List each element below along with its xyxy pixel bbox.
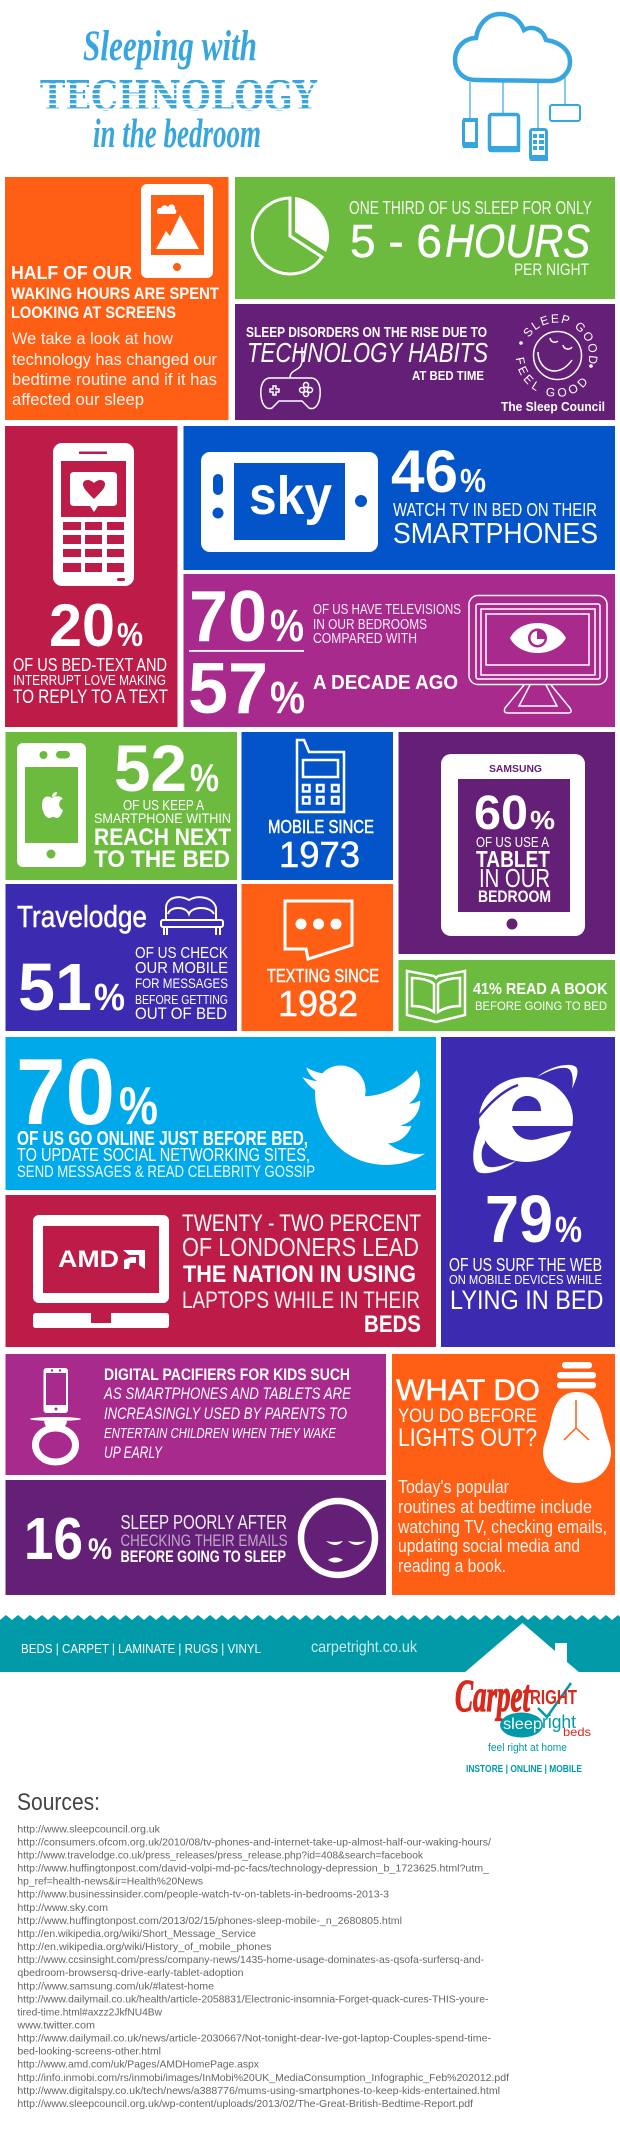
icon: pie chart <box>252 197 329 274</box>
logo: carpetright sleepright beds: sleep <box>503 1716 542 1733</box>
panel: half of our waking hours <box>5 177 228 420</box>
icon: twitter bird <box>303 1065 425 1165</box>
stat: % <box>94 977 125 1019</box>
text block <box>313 601 461 647</box>
stat: % <box>190 757 219 800</box>
heading <box>11 263 220 322</box>
text block: OF US USE A <box>476 834 549 851</box>
text block: bedtime routine and if it has <box>12 370 217 389</box>
icon: amd laptop: AMD <box>58 1246 119 1273</box>
icon: cloud with hanging devices <box>455 14 580 161</box>
text block: IN OUR <box>479 863 550 893</box>
stat <box>350 215 590 267</box>
text block: UP EARLY <box>104 1443 163 1462</box>
logo: carpetright sleepright beds <box>455 1670 591 1775</box>
panel: sleep disorders <box>235 304 615 420</box>
panel: 46% sky <box>184 426 615 570</box>
stat: % <box>117 616 143 653</box>
stat: 57 percent: % <box>270 672 305 723</box>
stat: 16 <box>24 1506 83 1572</box>
sources list <box>16 1824 509 2110</box>
text block: technology has changed our <box>12 350 217 369</box>
panel: 41% read a book <box>398 960 615 1031</box>
panel: texting since 1982: 1982 <box>278 983 358 1024</box>
text block: updating social media and <box>398 1536 580 1556</box>
sources list: http://www.huffingtonpost.com/david-volpi-md-pc-facs/technology-depression_b_1723625.html?utm_ <box>17 1864 489 1874</box>
icon: samsung tablet: SAMSUNG <box>489 764 542 775</box>
text block <box>135 945 228 1023</box>
sources heading: Sources: <box>17 1789 100 1816</box>
sources list: http://www.dailymail.co.uk/health/article-2058831/Electronic-insomnia-Forget-quack-cures-THIS-youre- <box>17 1994 489 2005</box>
text block: affected our sleep <box>12 390 144 409</box>
icon: amd laptop <box>33 1215 169 1328</box>
text block: BEFORE GOING TO SLEEP <box>120 1547 286 1566</box>
text block <box>120 1512 288 1566</box>
text block: OF US KEEP A <box>123 797 204 814</box>
text block: TO UPDATE SOCIAL NETWORKING SITES, <box>17 1145 310 1165</box>
icon: tablet with picture <box>141 184 213 278</box>
footer band: carpetright <box>0 1615 620 1673</box>
sources list: tired-time.html#axzz2JkfNU4Bw <box>17 2007 162 2018</box>
text block: ENTERTAIN CHILDREN WHEN THEY WAKE <box>104 1425 337 1442</box>
heading: LIGHTS OUT? <box>398 1424 537 1452</box>
panel: 16% sleep poorly <box>6 1480 386 1595</box>
text block: OF US HAVE TELEVISIONS <box>313 601 461 618</box>
panel: mobile since 1973: MOBILE SINCE <box>268 817 374 837</box>
panel: 52% smartphone <box>6 731 237 880</box>
icon: speech bubble <box>285 901 352 959</box>
stat: 79 <box>485 1182 553 1257</box>
panel: sleep disorders: AT BED TIME <box>412 368 484 383</box>
sources list: http://www.sleepcouncil.org.uk <box>17 1824 161 1835</box>
panel: 70% go online twitter <box>6 1037 436 1190</box>
sources list: http://www.travelodge.co.uk/press_releases/press_release.php?id=408&search=facebook <box>17 1850 424 1862</box>
text block: OF LONDONERS LEAD <box>182 1232 419 1262</box>
stat <box>18 950 125 1025</box>
panel: 70% vs 57% televisions: A DECADE AGO <box>313 672 458 694</box>
panel: 41% read a book: 41% READ A BOOK <box>473 981 608 998</box>
sources list: qbedroom-browsersq-drive-early-tablet-adoption <box>17 1968 244 1979</box>
icon: sleep good feel good badge <box>516 314 598 397</box>
icon: phone with sky logo <box>201 452 378 552</box>
panel: sleep disorders: TECHNOLOGY HABITS <box>247 337 488 368</box>
sources list: http://en.wikipedia.org/wiki/History_of_mobile_phones <box>17 1942 272 1953</box>
icon: vintage mobile phone <box>297 740 344 812</box>
text block <box>397 1477 607 1576</box>
panel: 20% bed-text <box>5 426 178 727</box>
heading: YOU DO BEFORE <box>398 1406 537 1427</box>
sources list: www.twitter.com <box>16 2020 95 2032</box>
sources list: http://www.amd.com/uk/Pages/AMDHomePage.aspx <box>17 2060 260 2071</box>
text block: REACH NEXT <box>94 824 231 851</box>
text block: TO THE BED <box>94 846 230 873</box>
panel: 46% sky: SMARTPHONES <box>393 518 598 550</box>
title: Sleeping with <box>83 23 257 70</box>
stat: 57 percent <box>188 649 305 729</box>
stat: 70 percent: % <box>270 600 304 651</box>
text block: TO REPLY TO A TEXT <box>13 687 168 708</box>
stat: 5 - 6 <box>350 215 442 267</box>
text block: INTERRUPT LOVE MAKING <box>13 672 166 689</box>
panel: twenty-two percent amd <box>6 1195 436 1347</box>
sources list: http://info.inmobi.com/rs/inmobi/images/InMobi%20UK_MediaConsumption_Infographic_Feb%202012.pdf <box>17 2073 509 2084</box>
stat: 60 <box>474 787 528 840</box>
sources list: http://consumers.ofcom.org.uk/2010/08/tv-phones-and-internet-take-up-almost-half-our-waking-hours/ <box>17 1837 491 1848</box>
logo: carpetright sleepright beds: beds <box>563 1725 591 1739</box>
panel: sleep disorders: SLEEP DISORDERS ON THE RISE DUE TO <box>246 325 487 341</box>
heading: WHAT DO <box>396 1374 540 1407</box>
panel: mobile since 1973 <box>242 732 393 880</box>
sources list: hp_ref=health-news&ir=Health%20News <box>17 1877 203 1888</box>
text block: DIGITAL PACIFIERS FOR KIDS SUCH <box>104 1365 350 1384</box>
stat: HOURS <box>445 215 590 267</box>
stat: 70 percent <box>189 577 304 657</box>
icon: sleep good feel good badge: SLEEP GOOD <box>524 314 598 364</box>
sources list: http://www.huffingtonpost.com/2013/02/15/phones-sleep-mobile-_n_2680805.html <box>17 1916 402 1927</box>
sources list: bed-looking-screens-other.html <box>17 2047 161 2058</box>
text block: CHECKING THEIR EMAILS <box>120 1531 288 1550</box>
icon: internet explorer logo <box>473 1065 577 1173</box>
sources list: http://www.ccsinsight.com/press/company-news/1435-home-usage-dominates-as-qsofa-surfersq-and- <box>17 1955 484 1966</box>
text block: BEDROOM <box>478 887 551 906</box>
panel: sleep disorders: The Sleep Council <box>501 399 605 414</box>
text block: BEDS <box>364 1311 421 1338</box>
sources list: http://www.dailymail.co.uk/news/article-2030667/Not-tonight-dear-Ive-got-laptop-Couples-spend-time- <box>17 2034 491 2045</box>
logo: carpetright sleepright beds: feel right at home <box>488 1742 567 1754</box>
panel: digital pacifiers <box>6 1354 386 1475</box>
icon: television with eye <box>469 596 607 713</box>
icon: game controller <box>261 347 320 408</box>
panel: texting since 1982 <box>242 884 393 1031</box>
text block <box>476 834 551 906</box>
text block: TABLET <box>476 846 550 872</box>
text block: BEFORE GETTING <box>135 992 228 1007</box>
text block: FOR MESSAGES <box>135 975 228 991</box>
text block: reading a book. <box>398 1556 506 1576</box>
stat: % <box>555 1209 582 1250</box>
stat: 20 <box>49 592 115 659</box>
stat: 57 percent: 57 <box>188 649 268 729</box>
title: TECHNOLOGY <box>40 72 318 120</box>
stat: % <box>119 1077 158 1136</box>
text block: AS SMARTPHONES AND TABLETS ARE <box>103 1384 352 1403</box>
panel: 41% read a book: BEFORE GOING TO BED <box>475 999 607 1013</box>
stat: % <box>460 462 486 499</box>
logo: carpetright sleepright beds: INSTORE | ONLINE | MOBILE <box>466 1764 582 1775</box>
sources list: http://www.businessinsider.com/people-watch-tv-on-tablets-in-bedrooms-2013-3 <box>17 1890 389 1901</box>
icon: phone with sky logo: sky <box>249 466 332 526</box>
panel: 51% travelodge <box>6 884 237 1031</box>
text block: INCREASINGLY USED BY PARENTS TO <box>104 1404 347 1423</box>
icon: bed <box>161 897 223 935</box>
text block: routines at bedtime include <box>398 1497 592 1517</box>
icon: samsung tablet <box>441 754 585 936</box>
text block: OF US GO ONLINE JUST BEFORE BED, <box>17 1128 308 1150</box>
text block: SMARTPHONE WITHIN <box>94 810 231 826</box>
sources list: http://www.samsung.com/uk/#latest-home <box>17 1981 214 1992</box>
panel: 70% vs 57% televisions <box>184 574 615 729</box>
title: in the bedroom <box>93 110 261 156</box>
text block <box>182 1210 421 1338</box>
text block <box>12 329 217 409</box>
stat: 51 <box>18 950 92 1025</box>
panel: 60% tablet samsung <box>398 732 615 954</box>
icon: sleep good feel good badge: FEEL GOOD <box>516 357 586 397</box>
text block: TWENTY - TWO PERCENT <box>182 1210 421 1237</box>
stat: 52 <box>114 731 187 805</box>
logo: carpetright sleepright beds: Carpet <box>455 1670 531 1721</box>
sources list: http://www.digitalspy.co.uk/tech/news/a388776/mums-using-smartphones-to-keep-kids-entertained.html <box>17 2086 500 2097</box>
icon: house silhouette <box>464 1623 580 1673</box>
stat: 70 percent: 70 <box>189 577 267 657</box>
stat <box>114 731 219 805</box>
logo: carpetright sleepright beds: RIGHT <box>530 1687 577 1709</box>
text block: SLEEP POORLY AFTER <box>120 1512 287 1534</box>
text block: SEND MESSAGES & READ CELEBRITY GOSSIP <box>17 1162 315 1181</box>
icon: phone pacifier <box>30 1368 81 1462</box>
text block: LAPTOPS WHILE IN THEIR <box>182 1287 420 1314</box>
heading <box>396 1374 540 1452</box>
heading: LOOKING AT SCREENS <box>11 303 176 322</box>
sources list: http://en.wikipedia.org/wiki/Short_Message_Service <box>17 1929 256 1940</box>
panel: 51% travelodge: Travelodge <box>17 899 147 934</box>
panel: what do you do before lights out <box>392 1354 615 1595</box>
text block <box>13 655 168 708</box>
heading: HALF OF OUR <box>11 263 132 283</box>
text block <box>17 1128 315 1181</box>
text block <box>94 797 231 873</box>
title <box>40 23 318 156</box>
text block: OUT OF BED <box>135 1004 227 1023</box>
text block: THE NATION IN USING <box>183 1261 416 1288</box>
panel: 5-6 hours: PER NIGHT <box>514 260 589 279</box>
footer band: carpetright: BEDS | CARPET | LAMINATE | RUGS | VINYL <box>21 1641 261 1656</box>
text block: Today's popular <box>398 1477 509 1497</box>
stat: % <box>530 805 555 835</box>
text block: OF US CHECK <box>135 945 228 962</box>
stat: 46 <box>391 438 458 505</box>
sources list: http://www.sleepcouncil.org.uk/wp-content/uploads/2013/02/The-Great-British-Bedtime-Report.pdf <box>17 2099 473 2110</box>
footer band: carpetright: carpetright.co.uk <box>311 1639 418 1656</box>
icon: smartphone with apple <box>17 743 86 867</box>
icon: sleepy face <box>301 1501 375 1575</box>
stat: 70 <box>16 1039 115 1144</box>
text block: OF US BED-TEXT AND <box>13 655 167 675</box>
panel: mobile since 1973: 1973 <box>279 834 360 875</box>
text block: IN OUR BEDROOMS <box>313 616 427 633</box>
icon: open book <box>407 971 465 1022</box>
sources list: http://www.sky.com <box>17 1903 108 1914</box>
stat: % <box>88 1533 112 1566</box>
logo: carpetright sleepright beds: right <box>542 1712 576 1732</box>
icon: light bulb <box>543 1362 611 1483</box>
heading: WAKING HOURS ARE SPENT <box>11 284 220 303</box>
stat <box>474 787 555 840</box>
panel: texting since 1982: TEXTING SINCE <box>267 966 379 986</box>
text block: OUR MOBILE <box>135 960 228 977</box>
text block: We take a look at how <box>12 329 174 348</box>
text block: COMPARED WITH <box>313 630 417 647</box>
panel: 79% internet explorer <box>441 1037 615 1347</box>
text block <box>103 1365 352 1462</box>
panel: 5-6 hours <box>235 177 615 299</box>
text block <box>449 1255 604 1315</box>
icon: phone with heart message <box>53 443 134 586</box>
